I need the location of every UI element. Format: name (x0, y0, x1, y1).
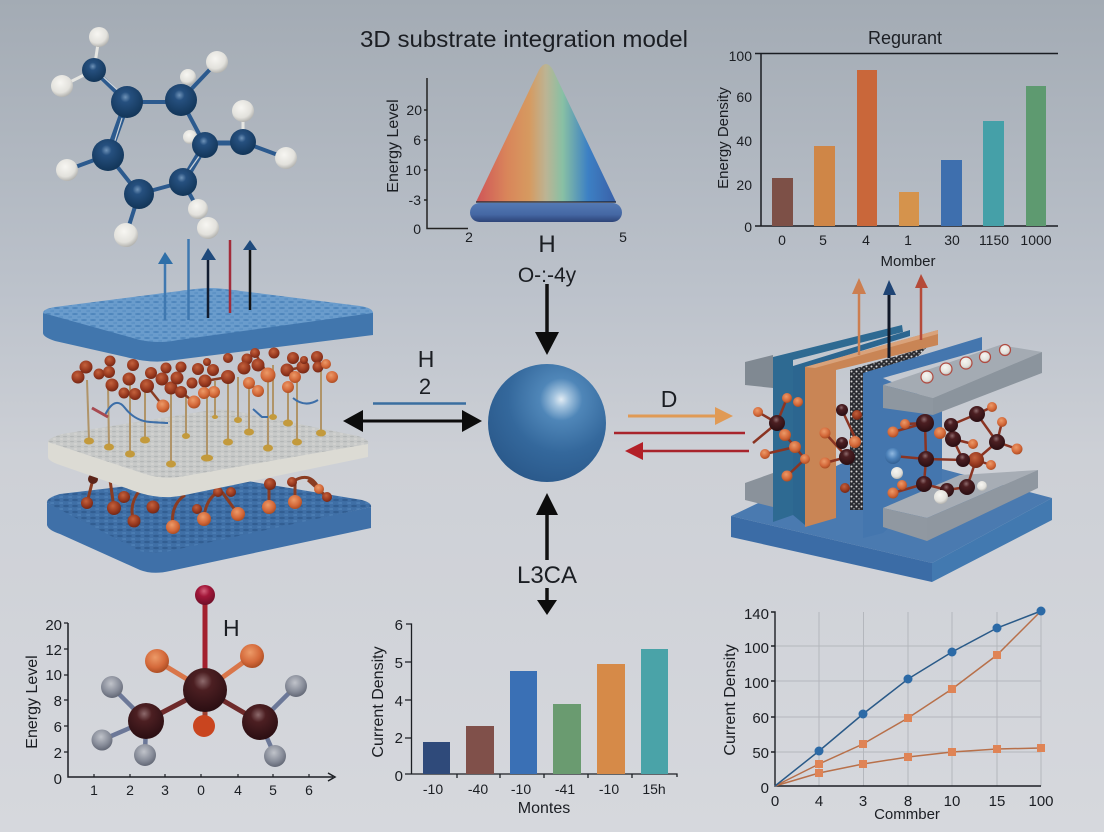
x ticks (771, 793, 1054, 810)
label: L3CA: L3CA (517, 562, 577, 589)
x axis title: Momber (880, 253, 936, 270)
y ticks: 100 (744, 640, 769, 657)
label: H 2: H (418, 346, 434, 372)
y ticks: 60 (752, 710, 769, 727)
x ticks (423, 781, 666, 797)
y axis title: Energy Level (385, 99, 402, 193)
cone (476, 64, 616, 202)
x ticks: -10 (511, 781, 531, 797)
y ticks: 6 (395, 617, 403, 634)
y ticks: 20 (45, 617, 62, 634)
arrow: double headed (343, 410, 482, 432)
x ticks: 5 (269, 782, 277, 798)
label: H 2: 2 (419, 374, 431, 399)
x ticks (778, 232, 1052, 248)
upper grey shelf (883, 345, 1042, 415)
y axis title: Energy Density (715, 87, 732, 189)
x ticks: 1150 (979, 232, 1009, 248)
x ticks: 0 (771, 793, 779, 810)
y ticks: 0 (54, 771, 62, 788)
rear grey bars (745, 355, 773, 507)
y ticks: 5 (395, 655, 403, 672)
chart: Regurant bar chart (715, 28, 1058, 270)
y ticks: 100 (744, 675, 769, 692)
y ticks: 40 (736, 133, 752, 149)
blue line (373, 402, 466, 405)
x ticks (465, 229, 627, 245)
molecule (92, 585, 307, 767)
front blue panel (863, 337, 982, 538)
pillar molecules (72, 348, 338, 468)
x ticks: 0 (778, 232, 786, 248)
axes (405, 624, 677, 778)
bars (772, 70, 1046, 226)
x ticks: 1000 (1020, 232, 1052, 248)
shelf spheres (921, 344, 1010, 383)
x ticks: 30 (944, 232, 960, 248)
x ticks: 15 (989, 793, 1005, 810)
label: H 2 (418, 346, 434, 399)
label: O-:-4y: O-:-4y (518, 264, 577, 287)
x ticks: 5 (619, 229, 627, 245)
x ticks: 4 (234, 782, 242, 798)
axes (755, 54, 1058, 226)
title: 3D substrate integration model (360, 26, 688, 52)
ribbons (92, 398, 318, 423)
y ticks: 100 (729, 48, 752, 64)
x ticks: -41 (555, 781, 575, 797)
x ticks: 8 (904, 793, 912, 810)
x ticks: 3 (161, 782, 169, 798)
y ticks (45, 617, 62, 788)
orange panel (805, 330, 938, 527)
chart: energy level with molecule (24, 585, 335, 798)
substrate upward arrows (158, 239, 257, 320)
label: H.: H (223, 615, 240, 641)
x ticks (90, 782, 313, 798)
label: D: D (661, 386, 677, 412)
arrow: red left (625, 442, 749, 460)
x ticks: -10 (423, 781, 443, 797)
blue rear panels (773, 325, 910, 525)
arrow: up into sphere (536, 493, 558, 560)
y ticks: 60 (736, 89, 752, 105)
x ticks: 1 (904, 232, 912, 248)
y ticks: 6 (54, 719, 62, 736)
y ticks: 50 (752, 745, 769, 762)
x ticks: 4 (815, 793, 823, 810)
chart: energy level cone (385, 64, 627, 245)
chart: current density bars (370, 617, 677, 817)
y ticks (405, 102, 422, 237)
x ticks: -10 (599, 781, 619, 797)
molecule: right cluster (885, 402, 1022, 504)
x ticks: 10 (944, 793, 960, 810)
x ticks: 5 (819, 232, 827, 248)
y ticks: 6 (413, 132, 421, 148)
arrow: down into sphere (535, 284, 559, 355)
series: blue (775, 606, 1046, 786)
y ticks: 20 (406, 102, 422, 118)
axes (771, 612, 1041, 786)
sphere (488, 364, 606, 482)
y axis title: Current Density (370, 646, 387, 758)
middle grey plate (48, 410, 368, 497)
y ticks: 2 (395, 730, 403, 747)
chart: current density lines (722, 606, 1054, 823)
y ticks: 0 (744, 219, 752, 235)
y ticks: 2 (54, 745, 62, 762)
x axis title: Montes (518, 800, 570, 817)
label: H: H (538, 231, 556, 258)
x ticks: 100 (1028, 793, 1054, 810)
arrow: down below L3CA (537, 588, 557, 615)
series: orange upper (775, 611, 1041, 786)
series: orange lower (775, 744, 1045, 786)
x ticks: -40 (468, 781, 488, 797)
y ticks: 8 (54, 693, 62, 710)
chart title: Regurant (868, 28, 942, 48)
panel: 3D device (731, 274, 1052, 582)
y ticks: -3 (409, 192, 421, 208)
x ticks: 0 (197, 782, 205, 798)
bottom blue plate (47, 476, 371, 573)
y ticks: 0 (761, 780, 769, 797)
x ticks: 1 (90, 782, 98, 798)
x ticks: 6 (305, 782, 313, 798)
x ticks: 3 (859, 793, 867, 810)
top blue plate (43, 288, 373, 362)
y ticks (744, 606, 769, 797)
y ticks: 10 (405, 162, 421, 178)
y ticks: 0 (413, 221, 421, 237)
arrow: orange right (628, 407, 733, 425)
red line (614, 432, 745, 434)
molecule: top left ball and stick (51, 27, 297, 247)
cone base (470, 203, 622, 222)
x axis title: Commber (874, 806, 940, 823)
speckled membrane (850, 347, 927, 510)
y ticks (729, 48, 752, 235)
panel: layered substrate stack (43, 239, 373, 573)
device upward arrows (852, 274, 928, 358)
y ticks: 4 (395, 693, 403, 710)
bars (423, 649, 668, 774)
y ticks: 10 (45, 667, 62, 684)
y ticks: 0 (395, 768, 403, 785)
grid (775, 612, 1041, 786)
x ticks: 4 (862, 232, 870, 248)
x ticks: 2 (126, 782, 134, 798)
y axis title: Energy Level (24, 655, 41, 749)
molecule: left cluster (753, 393, 862, 493)
y ticks: 20 (736, 177, 752, 193)
base slab (731, 450, 1052, 582)
axes (427, 78, 468, 228)
y ticks: 140 (744, 606, 769, 623)
y ticks (395, 617, 403, 785)
lower grey shelf (883, 470, 1038, 541)
x ticks: 2 (465, 229, 473, 245)
y axis title: Current Density (722, 644, 739, 756)
y ticks: 12 (45, 642, 62, 659)
axes (68, 623, 333, 777)
x ticks: 15h (642, 781, 666, 797)
lower molecules (81, 474, 332, 534)
